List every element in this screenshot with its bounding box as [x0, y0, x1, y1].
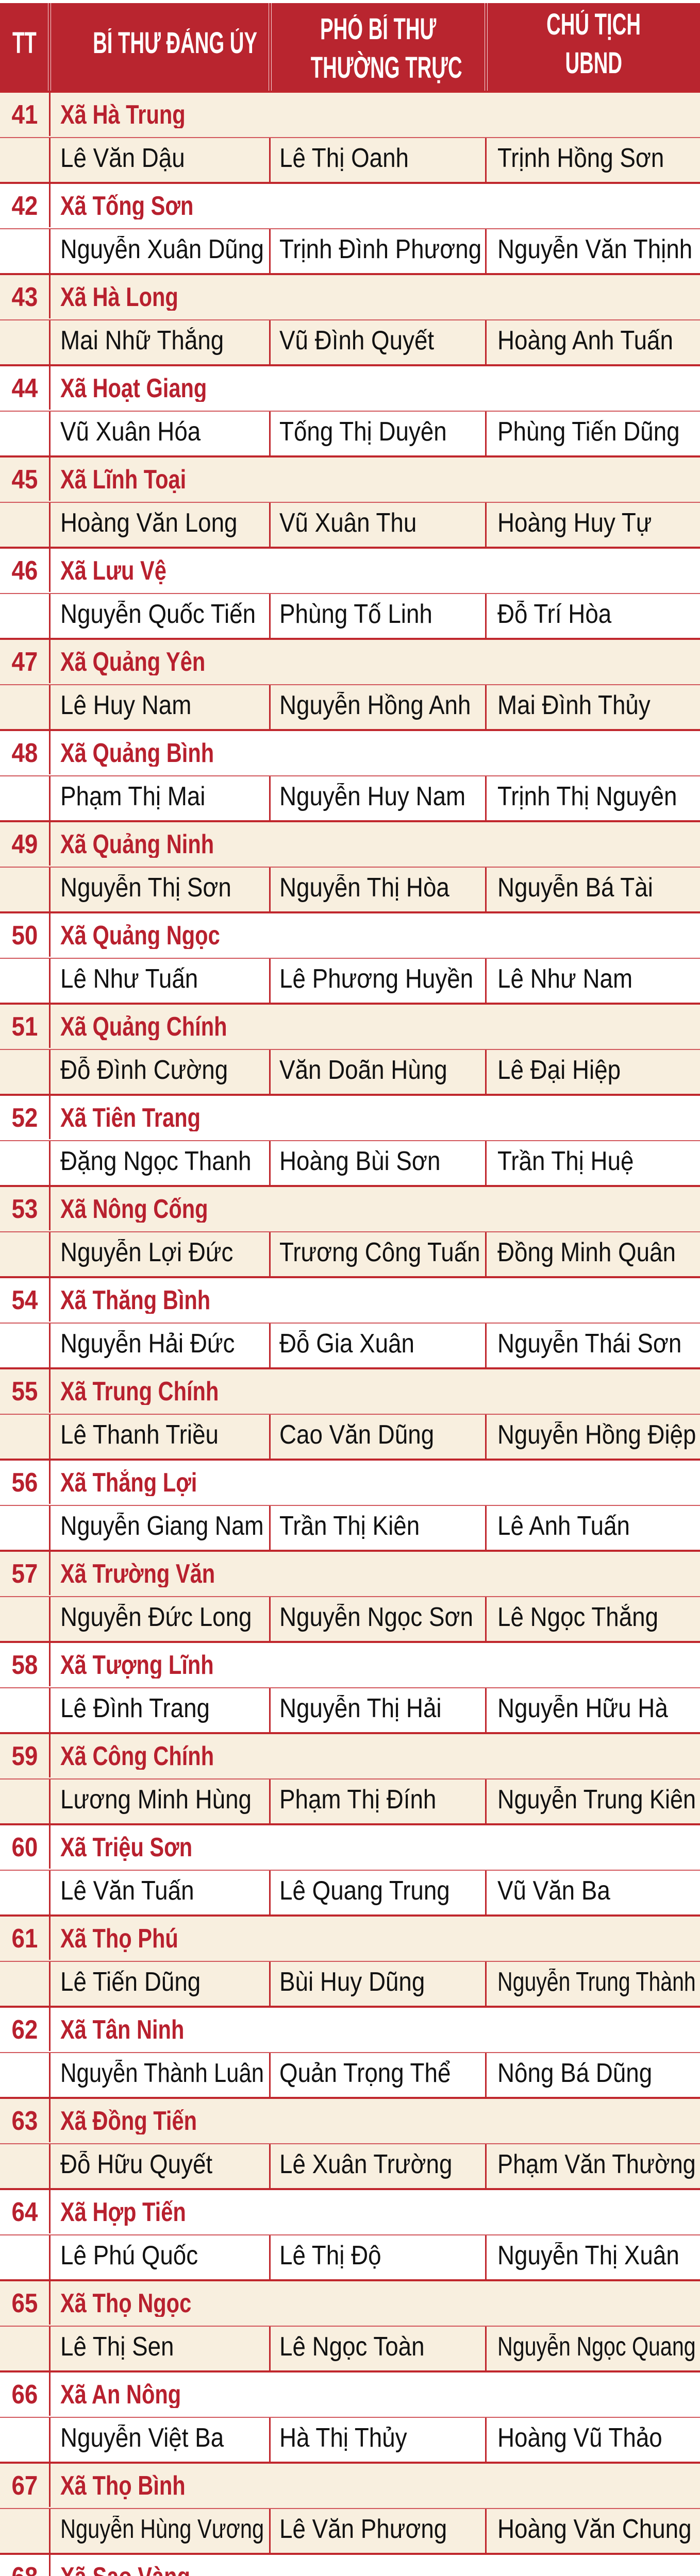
entry 57	[0, 1550, 700, 1641]
header: Chủ tịch UBND: UBND	[565, 46, 622, 80]
entry 65	[0, 2279, 700, 2370]
entry 68	[0, 2553, 700, 2576]
entry 60	[0, 1823, 700, 1914]
entry 43	[0, 273, 700, 364]
entry 50	[0, 911, 700, 1003]
entry 55	[0, 1367, 700, 1459]
entry 63	[0, 2097, 700, 2188]
entry 42	[0, 182, 700, 273]
entry 53	[0, 1185, 700, 1276]
header: Phó bí thư thường trực	[311, 14, 462, 84]
entry 48	[0, 729, 700, 820]
header: Phó bí thư thường trực: THƯỜNG TRỰC	[311, 51, 462, 84]
header: Chủ tịch UBND	[547, 10, 641, 80]
entry 44	[0, 364, 700, 455]
entry 67	[0, 2462, 700, 2553]
entry 46	[0, 547, 700, 638]
entry 47	[0, 638, 700, 729]
entry 51	[0, 1003, 700, 1094]
entry 61	[0, 1914, 700, 2006]
entry 45	[0, 455, 700, 547]
header	[0, 3, 700, 91]
entry 56	[0, 1459, 700, 1550]
entry 54	[0, 1276, 700, 1367]
entry 66	[0, 2370, 700, 2462]
entry 58	[0, 1641, 700, 1732]
entry 41	[0, 91, 700, 182]
entry 62	[0, 2006, 700, 2097]
entry 59	[0, 1732, 700, 1823]
entry 64	[0, 2188, 700, 2279]
entry 52	[0, 1094, 700, 1185]
entry 49	[0, 820, 700, 911]
